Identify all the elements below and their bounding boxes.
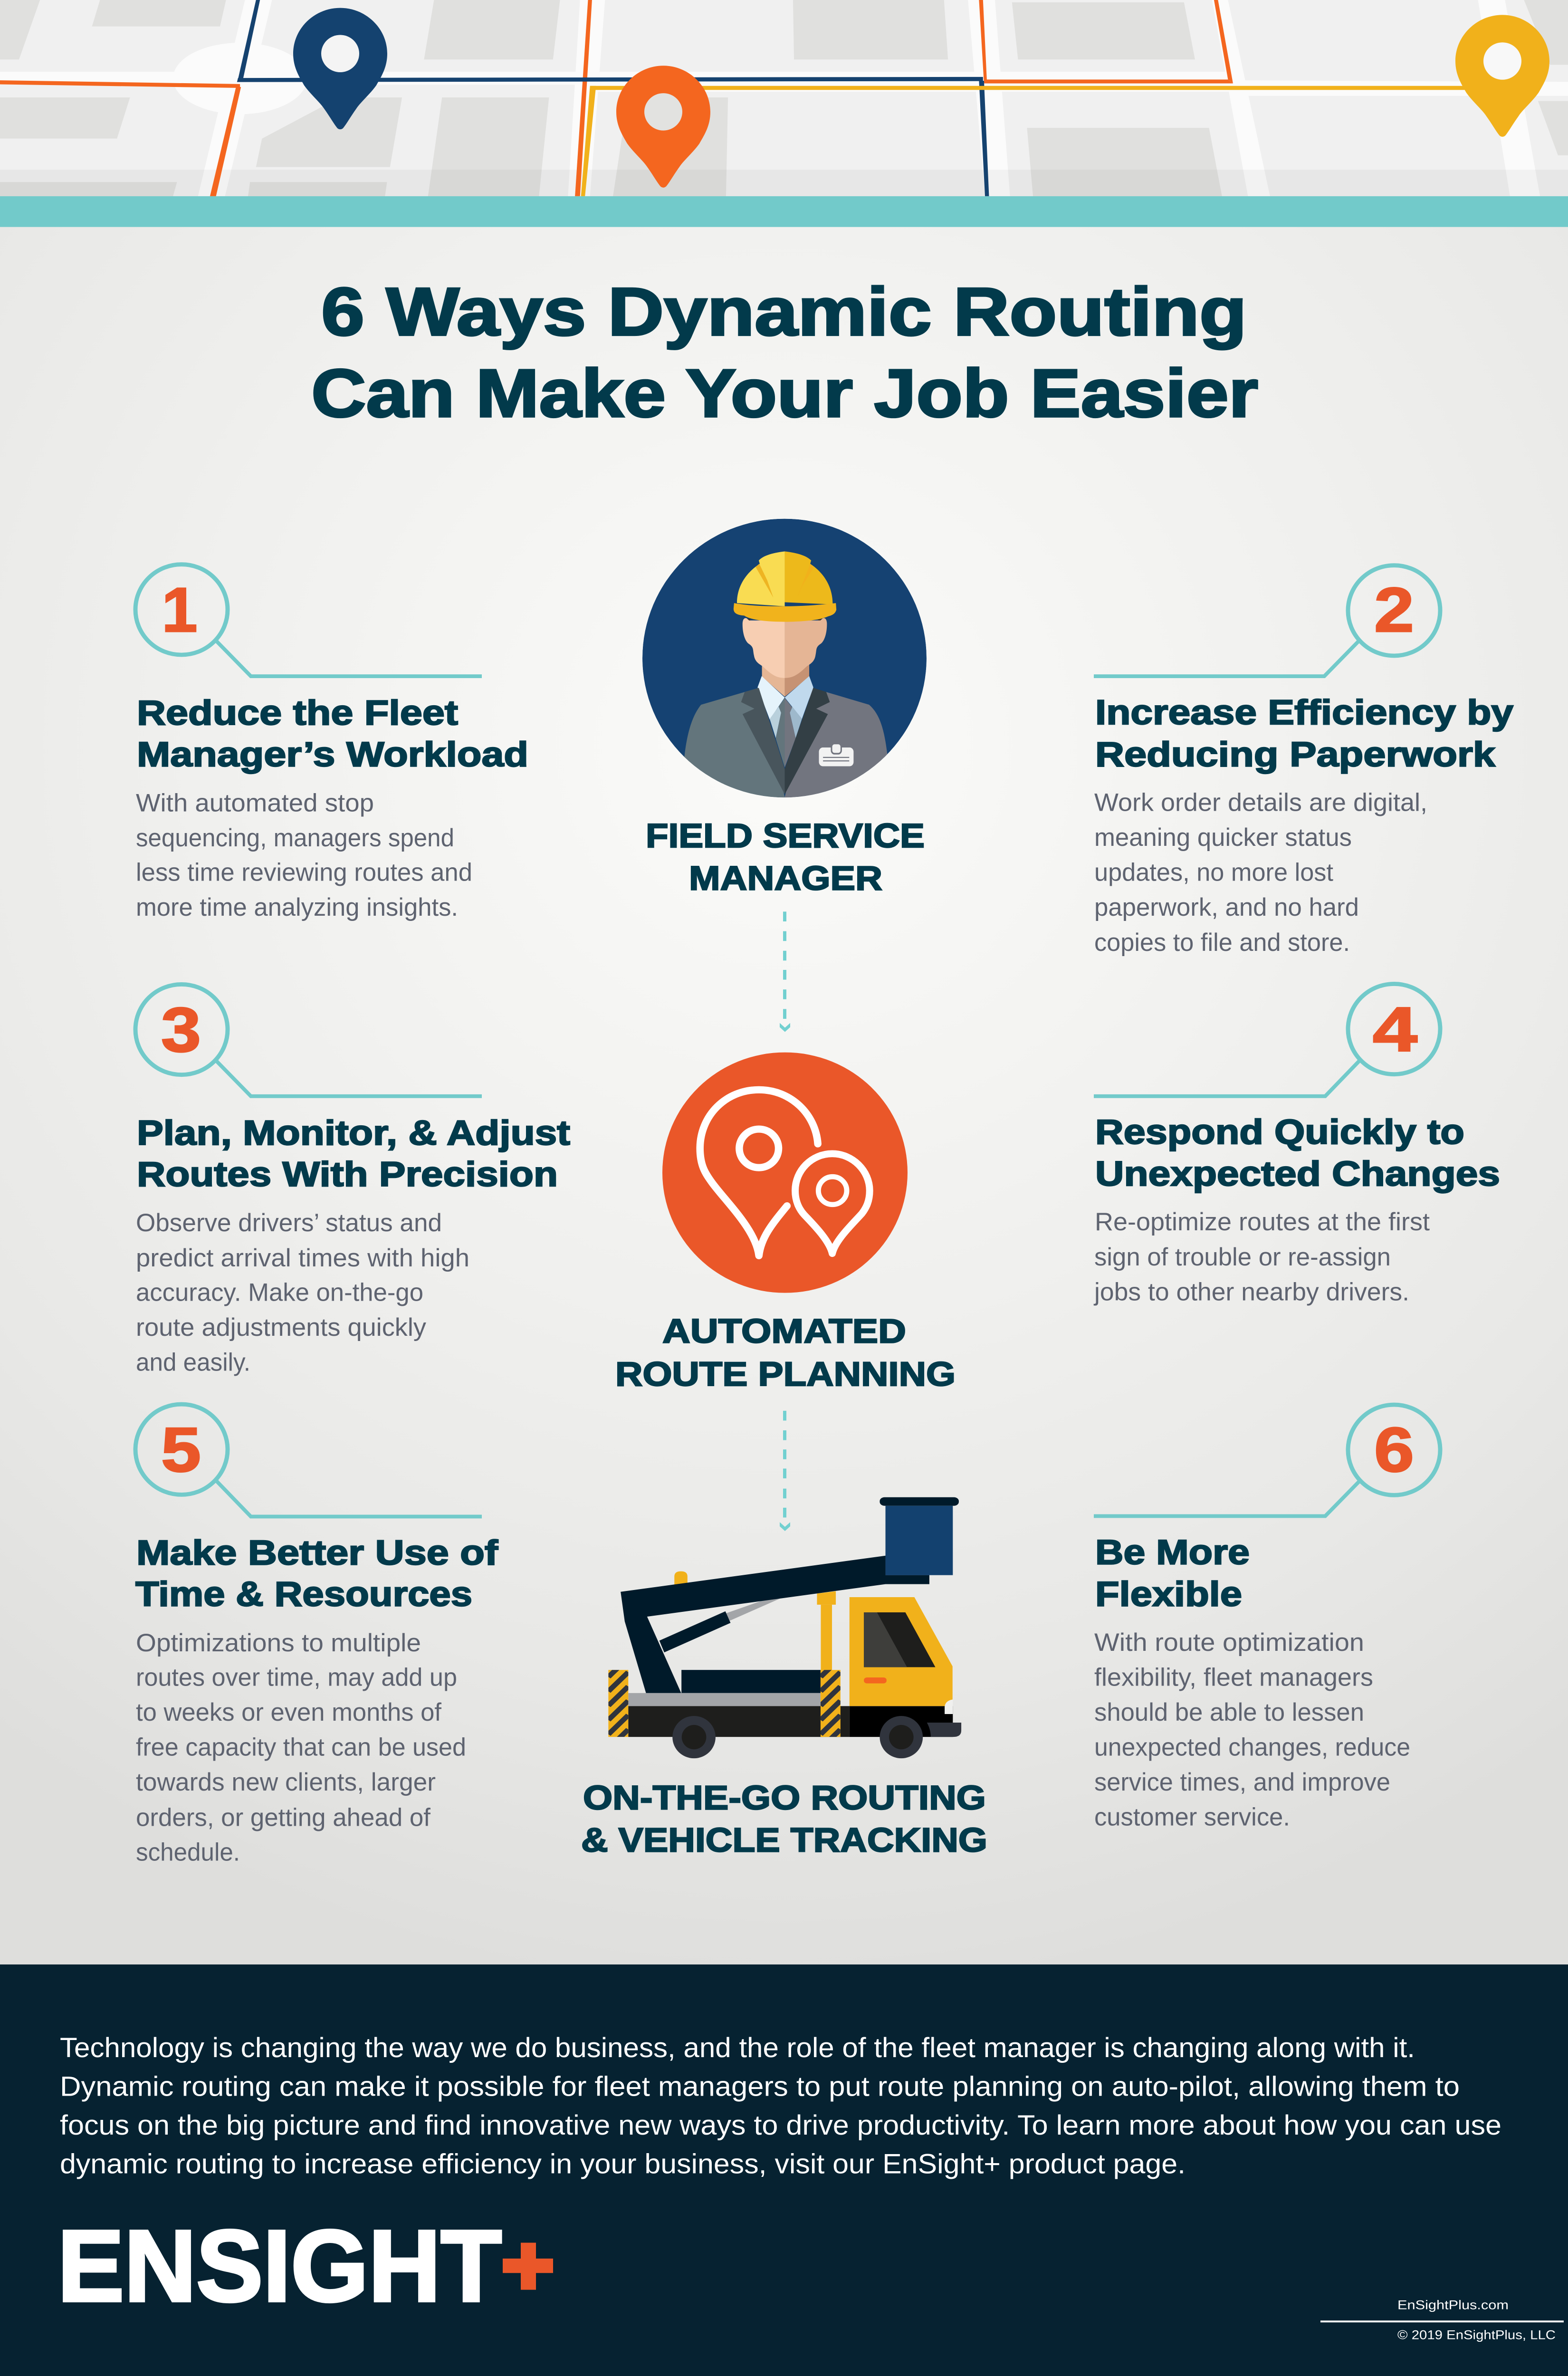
panel: item 2 — [1094, 565, 1513, 957]
label: on-the-go routing: ON-THE-GO ROUTING — [583, 1779, 986, 1817]
number badge 3 — [135, 984, 482, 1096]
label: automated route planning: ROUTE PLANNING — [615, 1355, 956, 1393]
map banner — [0, 0, 1568, 196]
body 6: unexpected changes, reduce — [1094, 1734, 1410, 1761]
footer paragraph — [60, 2032, 1501, 2179]
body 4 — [1093, 1208, 1430, 1306]
body 2: copies to file and store. — [1094, 929, 1350, 957]
body 1: more time analyzing insights. — [136, 894, 458, 921]
icon: route planning pins — [662, 1053, 908, 1293]
body 2 — [1094, 789, 1427, 957]
body 3 — [136, 1209, 469, 1376]
panel: footer — [0, 1964, 1568, 2376]
heading 4: Respond Quickly to — [1095, 1112, 1464, 1151]
teal band — [0, 196, 1568, 227]
body 6: customer service. — [1094, 1803, 1290, 1831]
body 3: Observe drivers’ status and — [136, 1209, 442, 1237]
heading 6: Be More — [1095, 1533, 1250, 1571]
footer paragraph: dynamic routing to increase efficiency in your business, visit our EnSight+ product page. — [60, 2148, 1186, 2179]
heading 2 — [1095, 693, 1513, 774]
body 3: route adjustments quickly — [136, 1313, 426, 1341]
number badge 2 — [1094, 565, 1440, 676]
body 1: With automated stop — [136, 789, 374, 817]
body 6: With route optimization — [1094, 1629, 1364, 1657]
body 4: jobs to other nearby drivers. — [1093, 1278, 1409, 1306]
label: field service manager: FIELD SERVICE — [646, 817, 925, 855]
heading 5 — [135, 1533, 498, 1614]
number badge 4 — [1094, 984, 1440, 1096]
heading 2: Increase Efficiency by — [1095, 693, 1513, 732]
heading 3: Plan, Monitor, & Adjust — [137, 1113, 570, 1152]
body 2: meaning quicker status — [1094, 824, 1352, 852]
footer paragraph: Dynamic routing can make it possible for fleet managers to put route planning on auto-pilot, allowing them to — [60, 2070, 1460, 2102]
number badge 4: 4 — [1373, 995, 1417, 1064]
footer paragraph: Technology is changing the way we do business, and the role of the fleet manager is changing along with it. — [60, 2032, 1415, 2063]
pin: navy — [293, 8, 387, 129]
body 4: sign of trouble or re-assign — [1094, 1243, 1391, 1271]
panel: item 5 — [135, 1404, 498, 1866]
body 1: sequencing, managers spend — [136, 824, 454, 852]
pin: orange — [616, 66, 710, 188]
body 2: paperwork, and no hard — [1094, 894, 1359, 921]
body 5: to weeks or even months of — [136, 1698, 441, 1726]
icon: bucket truck — [608, 1497, 961, 1763]
panel: item 4 — [1093, 984, 1500, 1306]
body 5 — [136, 1629, 466, 1866]
heading 3: Routes With Precision — [137, 1155, 558, 1194]
body 1 — [136, 789, 472, 921]
website and copyright: © 2019 EnSightPlus, LLC — [1397, 2328, 1556, 2342]
arrow: route planning to truck — [780, 1411, 790, 1531]
heading 6 — [1095, 1533, 1250, 1614]
heading 5: Make Better Use of — [136, 1533, 498, 1572]
body 6: service times, and improve — [1094, 1769, 1390, 1796]
number badge 5: 5 — [161, 1415, 201, 1485]
label: automated route planning — [615, 1313, 956, 1393]
label: field service manager: MANAGER — [689, 860, 882, 897]
number badge 3: 3 — [161, 995, 201, 1065]
number badge 2: 2 — [1374, 575, 1414, 645]
body 3: accuracy. Make on-the-go — [136, 1279, 423, 1306]
label: on-the-go routing: & VEHICLE TRACKING — [581, 1821, 987, 1859]
title: Can Make Your Job Easier — [311, 355, 1258, 431]
body 5: routes over time, may add up — [136, 1664, 457, 1691]
number badge 1: 1 — [162, 575, 198, 645]
background — [0, 227, 1568, 1965]
heading 2: Reducing Paperwork — [1095, 735, 1496, 774]
heading 6: Flexible — [1095, 1574, 1242, 1614]
panel: item 6 — [1094, 1405, 1440, 1831]
body 6 — [1094, 1629, 1410, 1831]
panel: item 1 — [135, 565, 528, 921]
number badge 6: 6 — [1374, 1415, 1414, 1485]
panel: item 3 — [135, 984, 570, 1376]
heading 5: Time & Resources — [135, 1574, 472, 1614]
pin: yellow — [1455, 15, 1549, 137]
heading 4: Unexpected Changes — [1095, 1154, 1500, 1193]
number badge 6 — [1094, 1405, 1440, 1516]
number badge 1 — [135, 565, 482, 676]
body 1: less time reviewing routes and — [136, 859, 472, 887]
logo: ENSIGHT — [57, 2209, 502, 2323]
body 3: predict arrival times with high — [136, 1244, 469, 1272]
body 2: updates, no more lost — [1094, 859, 1333, 887]
heading 1: Manager’s Workload — [137, 735, 528, 774]
body 3: and easily. — [136, 1349, 250, 1376]
heading 1 — [137, 693, 528, 774]
body 6: flexibility, fleet managers — [1094, 1664, 1373, 1691]
label: on-the-go routing — [581, 1779, 987, 1859]
label: automated route planning: AUTOMATED — [662, 1313, 906, 1350]
heading 1: Reduce the Fleet — [137, 693, 458, 732]
title — [311, 273, 1258, 431]
body 5: Optimizations to multiple — [136, 1629, 421, 1657]
heading 3 — [137, 1113, 570, 1194]
label: field service manager — [646, 817, 925, 897]
body 5: schedule. — [136, 1839, 240, 1866]
icon: field service manager — [642, 519, 927, 805]
arrow: manager to route planning — [780, 911, 790, 1032]
body 2: Work order details are digital, — [1094, 789, 1427, 816]
body 5: towards new clients, larger — [136, 1769, 436, 1796]
title: 6 Ways Dynamic Routing — [321, 273, 1247, 350]
number badge 5 — [135, 1404, 482, 1516]
heading 4 — [1095, 1112, 1500, 1193]
website and copyright: EnSightPlus.com — [1397, 2298, 1509, 2312]
website and copyright — [1320, 2298, 1564, 2342]
body 5: orders, or getting ahead of — [136, 1804, 430, 1832]
footer paragraph: focus on the big picture and find innovative new ways to drive productivity. To learn more about how you can use — [60, 2109, 1501, 2141]
body 4: Re-optimize routes at the first — [1095, 1208, 1430, 1236]
body 5: free capacity that can be used — [136, 1734, 466, 1761]
body 6: should be able to lessen — [1094, 1698, 1364, 1726]
